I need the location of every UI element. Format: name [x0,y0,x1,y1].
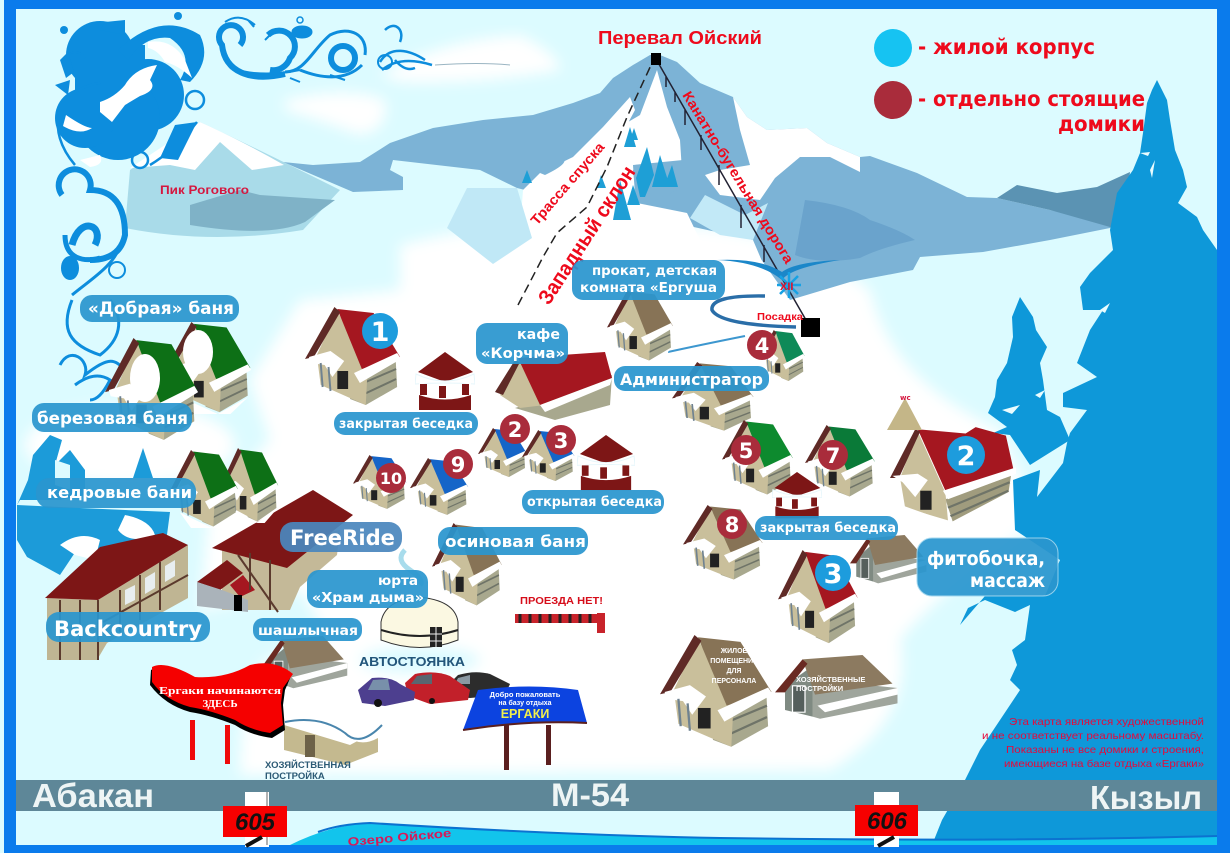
cafe Korchma building [495,352,612,420]
marker: red 9 [443,449,473,479]
icon: blue swoosh and snowflake: XII [780,281,793,293]
label: yurt [307,570,428,608]
hut 4 [760,330,805,384]
utility buildings: ХОЗЯЙСТВЕННЫЕ [796,675,865,684]
label: peak Rogovoy: Пик Рогового [160,185,249,197]
label: rental, kids room: прокат, детская [592,263,717,279]
label: birch bath: березовая баня [37,409,188,429]
personnel house: ДЛЯ [727,668,741,675]
km marker 606: 606 [867,808,908,835]
marker: red 3: 3 [554,429,568,453]
disclaimer [982,716,1204,770]
hut 5 [722,420,794,499]
label: ski run: Трасса спуска [527,139,608,228]
hut blue 2 [890,427,1016,531]
personnel house: ПЕРСОНАЛА [712,678,756,685]
no-entry barrier [515,596,605,633]
hut 10 [353,455,407,512]
label: yurt: юрта [378,574,418,589]
building: Backcountry [45,533,188,660]
label: lift road: Канатно-бугельная дорога [679,88,797,266]
WC tent: wc [900,394,911,402]
label: administrator: Администратор [620,370,763,389]
administrator hut [672,362,754,435]
icon: fir trees on slope [522,127,678,220]
decorative ornament: left trees [17,435,170,575]
label: rental, kids room: комната «Ергуша [580,280,717,296]
inner right shading [795,200,915,261]
snow on main slope [500,70,790,320]
hut 1 [305,307,401,411]
big fir tree [932,80,1217,845]
personnel house: ПОМЕЩЕНИЕ [710,658,758,665]
label: cafe Korchma [476,323,568,364]
smoke [401,550,421,585]
tree snow streaks [1002,152,1155,414]
label: FreeRide [280,522,402,552]
osinovaya bath hut [432,523,503,610]
marker: red 4: 4 [755,334,769,358]
marker: blue 3: 3 [824,559,842,590]
label: shashlik [253,618,362,641]
km marker 606 [855,792,918,847]
decorative wavy line [435,64,510,65]
gazebo open [577,435,635,490]
baths: Dobraya [105,322,251,446]
label: birch bath [32,403,192,432]
km marker 605: 605 [235,809,276,836]
mountain range [283,55,1115,300]
label: shashlik: шашлычная [258,623,358,639]
label: cafe Korchma: «Корчма» [481,346,565,362]
marker: red 7 [818,440,848,470]
legend: домики [1058,112,1145,136]
shashlik house [262,636,347,688]
lake label: Озеро Ойское [347,826,452,849]
utility building bottom-left: ХОЗЯЙСТВЕННАЯ [265,759,351,771]
utility building bottom-left: ПОСТРОЙКА [265,770,325,782]
label: open gazebo: открытая беседка [527,494,662,510]
label: Backcountry: Backcountry [54,617,202,641]
marker: red 8: 8 [725,513,739,537]
rental hut [607,290,674,365]
cars [358,672,510,707]
decorative ornament: top-left corner [55,12,204,168]
disclaimer: Показаны не все домики и строения, [1006,744,1204,756]
hut blue 3 [778,550,858,649]
marker: red 2: 2 [508,418,522,442]
snow field [25,222,1040,775]
marker: blue 1 [362,313,398,349]
km marker 605 [223,792,287,847]
marker: red 5 [731,435,761,465]
ski run dashed [518,63,652,305]
peak: Rogovoy [125,122,340,237]
hut 7 [805,425,876,501]
label: closed gazebo 1: закрытая беседка [339,416,473,432]
label: closed gazebo 2 [755,516,898,540]
label: aspen bath: осиновая баня [445,532,586,551]
sign: welcome [463,686,587,770]
WC tent [887,394,922,430]
label: phytobarrel, massage: массаж [970,570,1045,592]
label: Dobraya bath [80,295,239,322]
road M-54 [16,777,1217,816]
disclaimer: имеющиеся на базе отдыха «Ергаки» [1004,758,1204,770]
cloud band behind top ornament [285,35,560,135]
label: boarding: Посадка [757,311,803,323]
parking label: АВТОСТОЯНКА [359,654,466,669]
white cut on range [540,158,565,175]
label: west slope: Западный склон [534,162,640,309]
label: FreeRide: FreeRide [290,526,395,550]
decorative ornament: top border [219,17,432,82]
light slope patches [690,195,768,240]
road label: Kyzyl: Кызыл [1090,779,1202,816]
sign: welcome: ЕРГАКИ [501,707,549,721]
personnel house: ЖИЛОЕ [720,648,748,655]
legend: - отдельно стоящие [918,87,1145,111]
marker: red 4 [747,330,777,360]
marker: red 7: 7 [826,444,840,468]
small fir tree [988,297,1070,465]
marker: red 5: 5 [739,439,753,463]
label: aspen bath [438,527,588,555]
sign: Ergaki begin here [150,663,293,764]
baths: cedar [170,448,279,531]
legend: residential [874,29,912,67]
marker: red 9: 9 [451,453,465,477]
hut 9 [410,458,469,518]
gazebo closed 2 [772,472,822,518]
utility buildings [775,655,898,719]
lake [290,823,1217,849]
snow holes on left trees [55,460,155,560]
sign: Ergaki begin here: Ергаки начинаются [159,685,281,697]
marker: blue 2 [947,436,985,474]
sign: welcome: Добро пожаловать [490,690,561,699]
gazebo closed 1 [415,352,475,410]
legend [874,29,1145,136]
far dark ridge [997,172,1130,227]
label: cafe Korchma: кафе [517,327,560,343]
label: open gazebo [522,490,664,514]
icon: blue swoosh and snowflake [668,260,840,352]
personnel house [660,635,773,754]
lift line and stations [651,53,820,337]
hut 8 [683,505,763,584]
label: cedar baths: кедровые бани [47,483,192,502]
decorative ornament: left border [59,169,125,400]
utility building bottom-left [265,709,382,782]
marker: red 3 [546,425,576,455]
marker: red 8 [717,509,747,539]
label: rental, kids room [572,260,725,300]
label: phytobarrel, massage: фитобочка, [927,548,1045,570]
small hut 2 [478,428,527,480]
label: cedar baths [36,478,196,508]
legend: - жилой корпус [918,35,1095,59]
utility buildings: ПОСТРОЙКИ [796,684,843,693]
marker: red 2 [500,414,530,444]
small hut 3 [522,430,575,484]
marker: blue 1: 1 [371,317,389,348]
marker: red 10: 10 [380,469,402,488]
yurt [381,597,458,648]
marker: blue 2: 2 [957,441,975,472]
marker: blue 3 [815,555,851,591]
shed near 3 [850,535,926,583]
label: phytobarrel, massage [917,538,1058,596]
sign: Ergaki begin here: ЗДЕСЬ [202,698,238,710]
road label: M-54: М-54 [551,777,629,813]
label: Dobraya bath: «Добрая» баня [88,299,234,319]
legend: detached [874,81,912,119]
label: closed gazebo 1 [334,412,478,435]
road label: Abakan: Абакан [32,777,154,814]
no-entry barrier: ПРОЕЗДА НЕТ! [520,596,603,607]
disclaimer: Эта карта является художественной [1009,716,1204,728]
marker: red 10 [376,463,406,493]
label: yurt: «Храм дыма» [312,590,424,606]
main mountain [447,70,860,320]
sign: welcome: на базу отдыха [498,699,552,707]
building: FreeRide [197,490,353,612]
title: pass: Перевал Ойский [598,28,762,48]
label: closed gazebo 2: закрытая беседка [760,520,896,536]
disclaimer: и не соответствует реальному масштабу. [982,730,1204,742]
